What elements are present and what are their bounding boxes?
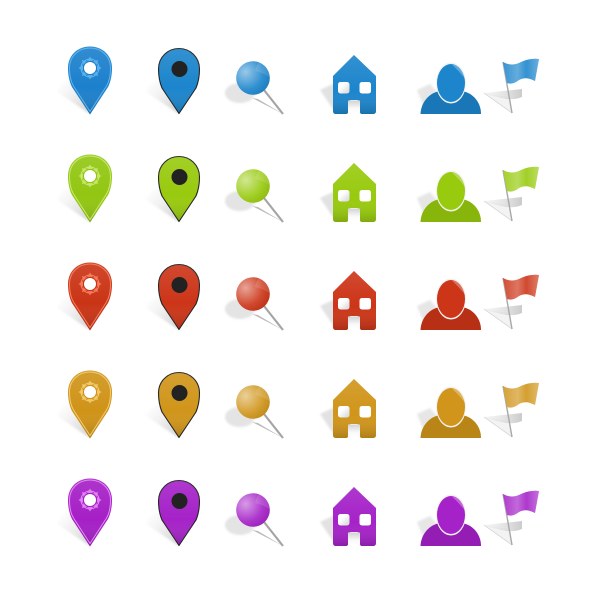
icon: red house xyxy=(320,271,376,330)
icon: purple push pin xyxy=(225,493,283,546)
icon: green house xyxy=(320,163,376,222)
row: blue icons xyxy=(57,46,539,114)
icon: blue dot pin xyxy=(146,48,200,114)
icon: purple person xyxy=(417,494,481,546)
icon: orange push pin xyxy=(225,385,283,438)
icon: red flag xyxy=(484,275,539,329)
row: orange icons xyxy=(57,370,539,438)
row: purple icons xyxy=(57,478,539,546)
icon: blue flag xyxy=(484,59,539,113)
icon: blue house xyxy=(320,55,376,114)
icon: green push pin xyxy=(225,169,283,222)
icon: green sun pin xyxy=(57,154,112,222)
icon: blue person xyxy=(417,62,481,114)
icon: red person xyxy=(417,278,481,330)
icon: green person xyxy=(417,170,481,222)
icon: red push pin xyxy=(225,277,283,330)
icon: green dot pin xyxy=(146,156,200,222)
icon: orange dot pin xyxy=(146,372,200,438)
icon: purple house xyxy=(320,487,376,546)
icon: orange sun pin xyxy=(57,370,112,438)
icon: purple flag xyxy=(484,491,539,545)
icon: purple sun pin xyxy=(57,478,112,546)
icon: orange person xyxy=(417,386,481,438)
row: red icons xyxy=(57,262,539,330)
row: green icons xyxy=(57,154,539,222)
icon: purple dot pin xyxy=(146,480,200,546)
icon: blue sun pin xyxy=(57,46,112,114)
icon: blue push pin xyxy=(225,61,283,114)
icon: orange house xyxy=(320,379,376,438)
icon: red sun pin xyxy=(57,262,112,330)
icon: red dot pin xyxy=(146,264,200,330)
icon: green flag xyxy=(484,167,539,221)
icon: orange flag xyxy=(484,383,539,437)
